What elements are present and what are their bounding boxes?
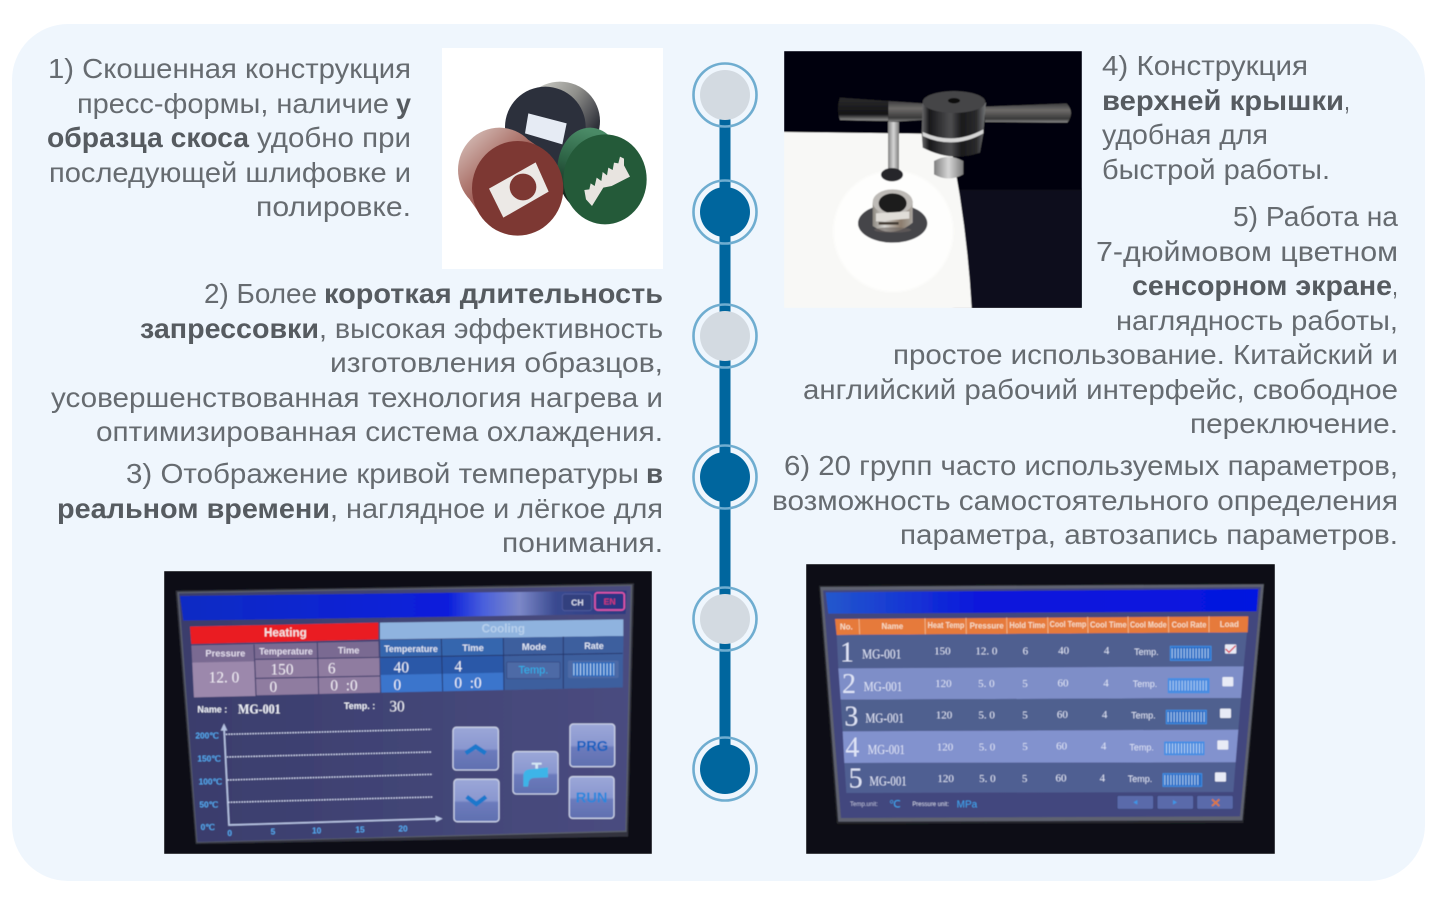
parameter rows: 4 [1103, 678, 1109, 690]
parameter rows: 5. 0 [979, 741, 996, 753]
text block 6: параметра, автозапись параметров. [900, 519, 1398, 550]
text block 3 [57, 458, 663, 558]
parameter rows: 12. 0 [975, 646, 998, 658]
text block 5: наглядность работы, [1116, 305, 1398, 336]
photo: three bevelled mold samples [442, 48, 663, 269]
text block 5: 7-дюймовом цветном [1096, 236, 1398, 267]
parameter rows: MG-001 [865, 710, 904, 725]
parameter rows: 5 [1022, 773, 1028, 785]
text block 5 [803, 201, 1399, 439]
text block 2: 2) Более [204, 278, 317, 309]
units and navigation: ℃ [889, 798, 901, 810]
cooling table [380, 619, 623, 694]
heating table: 0 :0 [330, 678, 358, 695]
parameter rows: 4 [845, 732, 859, 763]
text block 1: 1) Скошенная конструкция [48, 53, 411, 84]
text block 3: реальном времени [57, 493, 330, 524]
parameter rows: 4 [1101, 741, 1107, 753]
parameter rows: 5. 0 [978, 710, 995, 722]
table header: Cool Time [1090, 621, 1127, 630]
parameter rows: 5. 0 [979, 773, 996, 785]
control buttons: PRG [576, 739, 608, 755]
text block 2: запрессовки [140, 313, 319, 344]
cooling table: Mode [522, 642, 546, 652]
text block 5: 5) Работа на [1233, 201, 1399, 232]
parameter rows: 4 [1104, 645, 1110, 657]
text block 3: 3) Отображение кривой температуры [126, 458, 639, 489]
title bar: EN [604, 597, 616, 607]
T-handle [838, 91, 1071, 178]
text block 4: 4) Конструкция [1102, 50, 1308, 81]
heating table: 12. 0 [209, 669, 240, 686]
text block 5: сенсорном экране [1132, 270, 1392, 301]
parameter rows: 120 [936, 710, 953, 722]
screen photo: heating and cooling control interface [164, 571, 652, 854]
timeline node 3 [694, 304, 756, 368]
cooling table: 4 [454, 659, 462, 676]
parameter rows: 120 [937, 773, 954, 785]
heating table [190, 623, 380, 697]
parameter rows: 120 [937, 741, 954, 753]
black sample [505, 82, 600, 167]
cooling table: Temperature [384, 644, 438, 654]
parameter rows: 3 [844, 702, 858, 733]
load checkboxes [1215, 644, 1236, 782]
temperature curve chart: 150℃ [197, 753, 221, 763]
post and base [881, 122, 903, 181]
parameter rows: Temp. [1131, 711, 1156, 721]
heating table: Pressure [205, 649, 245, 659]
name and current temperature [197, 700, 405, 714]
text block 2: оптимизированная система охлаждения. [96, 416, 663, 447]
timeline: vertical line with circles [694, 64, 756, 800]
text block 4: верхней крышки [1102, 85, 1344, 116]
control buttons [453, 724, 615, 822]
heating table: 150 [270, 662, 294, 679]
text block 5: английский рабочий интерфейс, свободное [803, 374, 1398, 405]
text block 1: у [396, 88, 412, 119]
text block 1: последующей шлифовке и [49, 157, 411, 188]
parameter rows [837, 632, 1247, 795]
heating table: Temperature [259, 647, 313, 657]
parameter rows: 1 [840, 638, 854, 669]
text block 2: усовершенствованная технология нагрева и [51, 382, 663, 413]
text block 5: переключение. [1190, 408, 1398, 439]
name and current temperature: Name : [197, 705, 227, 715]
screen photo: parameter groups table [806, 564, 1275, 854]
name and current temperature: 30 [389, 699, 405, 716]
text block 2 [51, 278, 663, 447]
parameter rows: 60 [1056, 773, 1067, 785]
parameter rows: Temp. [1129, 742, 1154, 752]
blue title bar [826, 589, 1258, 614]
cooling table: 0 :0 [454, 675, 482, 692]
parameter rows: 4 [1100, 773, 1106, 785]
table header: Hold Time [1009, 621, 1046, 630]
cooling table: Temp. [518, 664, 548, 676]
text block 3: понимания. [502, 527, 663, 558]
parameter rows: 6 [1023, 645, 1029, 657]
heating table: 6 [328, 661, 336, 678]
parameter rows: 2 [842, 669, 856, 700]
text block 6: возможность самостоятельного определения [772, 485, 1398, 516]
text block 4: быстрой работы. [1102, 154, 1330, 185]
control buttons: RUN [576, 791, 608, 807]
temperature curve chart: 20 [398, 823, 408, 833]
text block 4: удобная для [1102, 119, 1268, 150]
text block 6: 6) 20 групп часто используемых параметров, [784, 450, 1398, 481]
temperature curve chart: 5 [271, 827, 276, 837]
cooling table: 40 [394, 660, 409, 677]
parameter rows: 60 [1057, 709, 1068, 721]
name and current temperature: Temp. : [344, 701, 375, 711]
timeline node 4 [694, 446, 756, 508]
units and navigation [850, 795, 1233, 810]
parameter rows: 4 [1102, 709, 1108, 721]
text block 1 [47, 53, 412, 222]
temperature curve chart [195, 723, 443, 838]
parameter rows: MG-001 [862, 646, 901, 661]
text block 1: образца скоса [47, 122, 250, 153]
table header: Load [1220, 620, 1239, 629]
parameter rows: 40 [1058, 645, 1070, 657]
parameter rows: Temp. [1133, 679, 1157, 689]
text block 5: , [1392, 270, 1398, 301]
cooling table: Cooling [482, 623, 525, 636]
text block 1: удобно при [257, 122, 411, 153]
cooling table: 0 [393, 677, 401, 694]
text block 6 [772, 450, 1398, 550]
table header: Cool Rate [1172, 621, 1207, 630]
cooling table: Rate [584, 641, 604, 651]
parameter rows: MG-001 [869, 774, 907, 789]
text block 5: простое использование. Китайский и [893, 339, 1398, 370]
title bar [180, 591, 627, 621]
temperature curve chart: 10 [312, 826, 322, 836]
table header: Name [881, 622, 904, 631]
table header: Cool Temp [1050, 620, 1086, 629]
parameter rows: 120 [935, 678, 952, 690]
heating table: Time [338, 645, 359, 655]
parameter rows: Temp. [1128, 774, 1152, 784]
temperature curve chart: 0 [227, 828, 232, 838]
parameter rows: 5 [1022, 678, 1028, 690]
units and navigation: Pressure unit: [912, 801, 949, 808]
parameter rows: 60 [1058, 678, 1069, 690]
parameter rows: 5 [1022, 741, 1028, 753]
text block 2: изготовления образцов, [330, 347, 663, 378]
parameter rows: 60 [1056, 741, 1068, 753]
rate gauges [1163, 646, 1211, 786]
text block 1: пресс-формы, наличие [77, 88, 389, 119]
timeline node 1 [694, 64, 756, 126]
cooling table: Time [462, 643, 484, 653]
timeline node 5 [694, 588, 756, 650]
red sample [458, 128, 563, 236]
temperature curve chart: 50℃ [199, 799, 218, 809]
parameter rows: 5. 0 [978, 678, 995, 690]
text block 3: , наглядное и лёгкое для [330, 493, 663, 524]
text block 2: короткая длительность [324, 278, 663, 309]
parameter rows: 150 [934, 646, 951, 658]
text block 2: , высокая эффективность [319, 313, 663, 344]
table header [835, 616, 1248, 635]
table header: Cool Mode [1130, 621, 1167, 630]
text block 4 [1102, 50, 1350, 185]
temperature curve chart: 15 [355, 825, 365, 835]
collar on lid [858, 189, 927, 243]
temperature curve chart: 200℃ [195, 730, 219, 740]
photo: upper lid construction [784, 51, 1082, 308]
parameter rows: 5 [849, 764, 863, 795]
green sample [557, 128, 647, 224]
table header: No. [840, 622, 853, 631]
table header: Pressure [970, 621, 1004, 630]
units and navigation: MPa [957, 799, 978, 810]
temperature curve chart: 0℃ [201, 822, 215, 832]
text block 3: в [646, 458, 663, 489]
text block 4: , [1344, 85, 1350, 116]
name and current temperature: MG-001 [238, 702, 281, 717]
heating table: Heating [264, 627, 307, 640]
parameter rows: MG-001 [868, 742, 905, 757]
text block 1: полировке. [256, 191, 411, 222]
timeline node 6 [694, 738, 756, 800]
heating table: 0 [269, 679, 277, 696]
table header: Heat Temp [928, 621, 964, 630]
title bar: CH [571, 597, 584, 607]
parameter rows: Temp. [1134, 647, 1159, 657]
timeline node 2 [694, 180, 756, 244]
temperature curve chart: 100℃ [199, 777, 222, 787]
parameter rows: MG-001 [864, 679, 902, 694]
units and navigation: Temp.unit: [850, 801, 878, 808]
parameter rows: 5 [1022, 709, 1028, 721]
